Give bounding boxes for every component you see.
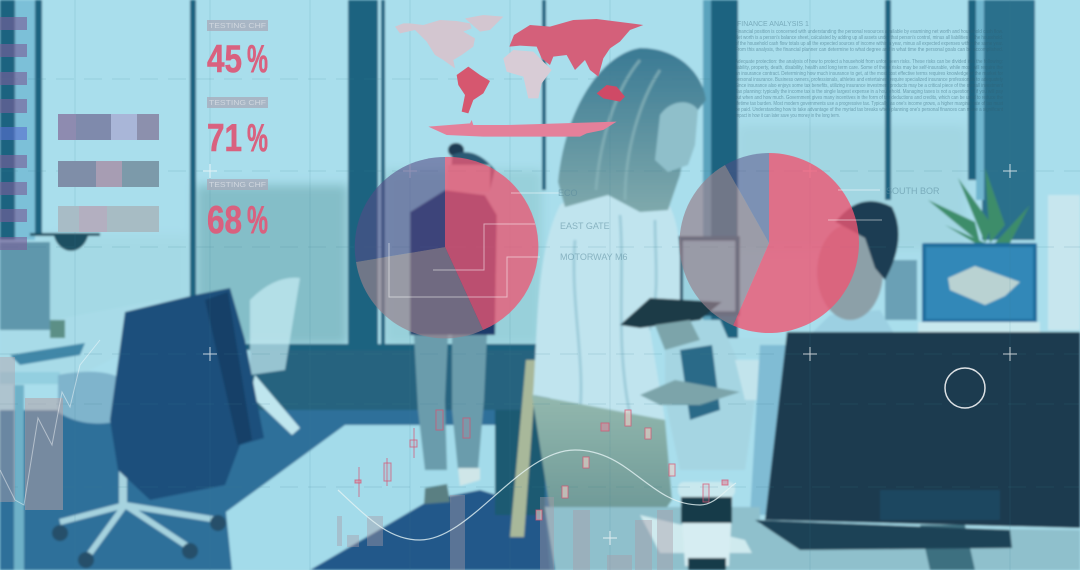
- stat: testing 71 percent: %: [247, 117, 268, 160]
- left desk: [0, 233, 170, 570]
- large dark monitor and keyboard: [755, 332, 1080, 550]
- candlesticks: [355, 410, 728, 520]
- translucent volume bars: [337, 495, 673, 570]
- wall and floor: [0, 350, 560, 570]
- financial analysis text block: of the household cash flow totals up all the expected sources of income within a year, minus all expected expenses within the same year.: [735, 41, 1003, 47]
- route lines: [389, 190, 882, 297]
- greenland: [465, 15, 503, 32]
- financial analysis text block: liability, property, death, disability, health and long term care. Some of these risks may be self-insurable, while most will require the: [735, 65, 1003, 71]
- stat: testing 71 percent: 71: [207, 117, 242, 160]
- window frames: [0, 0, 1035, 350]
- south america: [457, 67, 490, 113]
- office chair with blue blazer: [52, 278, 300, 568]
- eurasia: [509, 19, 643, 77]
- bar row 3: [58, 206, 159, 232]
- red slice: [733, 153, 859, 333]
- red slice: [445, 157, 538, 330]
- financial analysis text block: but when and how much. Government gives many incentives in the form of tax deductions and credits, which can be used to reduce the: [735, 95, 1003, 101]
- africa: [503, 50, 552, 98]
- financial analysis text block: From this analysis, the financial planner can determine to what degree and in what time the personal goals can be accomplished.: [735, 47, 1003, 53]
- financial analysis text block: personal insurance. Business owners, professionals, athletes and entertainers require specialized insurance professionals to adequately: [735, 77, 1003, 83]
- desk and coffee cup foreground: [545, 482, 1080, 570]
- financial analysis text block: Tax planning: typically the income tax is the single largest expense in a household. Managing taxes is not a question of if you will pay: [735, 89, 1003, 95]
- financial analysis text block: [735, 21, 1003, 119]
- financial analysis text block: be paid. Understanding how to take advantage of the myriad tax breaks when planning one's personal finances can make a significant: [735, 107, 1003, 113]
- right desk and small monitor with plant: [665, 168, 1080, 470]
- pie chart left: [355, 157, 538, 338]
- purple slice: [725, 153, 769, 243]
- window: distant buildings and trees: [42, 125, 967, 345]
- financial analysis text block: Financial position is concerned with understanding the personal resources available by examining net worth and household cash flow.: [735, 29, 1003, 35]
- stat: testing 68 percent: %: [247, 199, 268, 242]
- grey slice: [356, 247, 483, 338]
- map place labels: MOTORWAY M6: [560, 252, 628, 262]
- stat: testing 71 percent: [207, 97, 268, 160]
- world map: [395, 15, 643, 137]
- map place labels: [558, 186, 940, 262]
- stat: testing 68 percent: [207, 179, 268, 242]
- map place labels: SOUTH BOR: [886, 186, 940, 196]
- map place labels: ECO: [558, 188, 578, 198]
- woman seen from behind: [410, 143, 497, 504]
- stat: testing 68 percent: 68: [207, 199, 242, 242]
- stat: testing 68 percent: TESTING CHF: [209, 182, 266, 189]
- stat: testing 45 percent: 45: [207, 38, 242, 81]
- pie chart right: [679, 153, 859, 333]
- financial analysis text block: an insurance contract. Determining how much insurance to get, at the most cost effective terms requires knowledge of the market for: [735, 71, 1003, 77]
- horizontal segmented bars: [58, 114, 159, 232]
- central woman presenting: [532, 48, 740, 510]
- financial analysis text block: Since insurance also enjoys some tax benefits, utilizing insurance investment products may be a critical piece of the overall investment: [735, 83, 1003, 89]
- financial analysis text block: Net worth is a person's balance sheet, calculated by adding up all assets under that person's control, minus all liabilities of the household.: [735, 35, 1003, 41]
- stat: testing 71 percent: TESTING CHF: [209, 100, 266, 107]
- stat: testing 45 percent: TESTING CHF: [209, 23, 266, 30]
- financial analysis text block: impact in how it can later save you money in the long term.: [735, 113, 840, 119]
- antarctica: [428, 120, 617, 137]
- stat: testing 45 percent: [207, 20, 268, 81]
- line chart bottom left: [0, 340, 100, 510]
- stat: testing 45 percent: %: [247, 38, 268, 81]
- financial analysis text block: Adequate protection: the analysis of how to protect a household from unforeseen risks. These risks can be divided into the following:: [735, 59, 1003, 65]
- seated colleague: [750, 201, 899, 515]
- financial analysis text block: lifetime tax burden. Most modern governments use a progressive tax. Typically, as one's income grows, a higher marginal rate of tax must: [735, 101, 1003, 107]
- map place labels: EAST GATE: [560, 221, 610, 231]
- monitor ring indicator: [945, 368, 985, 408]
- grey slice: [679, 165, 769, 326]
- north america: [395, 20, 475, 68]
- purple slice: [355, 157, 445, 262]
- candlestick chart and bars: [337, 410, 736, 570]
- sine wave line: [338, 450, 736, 540]
- bar row 1: [58, 114, 159, 140]
- left stripe bars: [0, 17, 27, 250]
- australia: [597, 85, 625, 102]
- financial analysis text block: FINANCE ANALYSIS 1: [737, 21, 809, 28]
- bar row 2: [58, 161, 159, 187]
